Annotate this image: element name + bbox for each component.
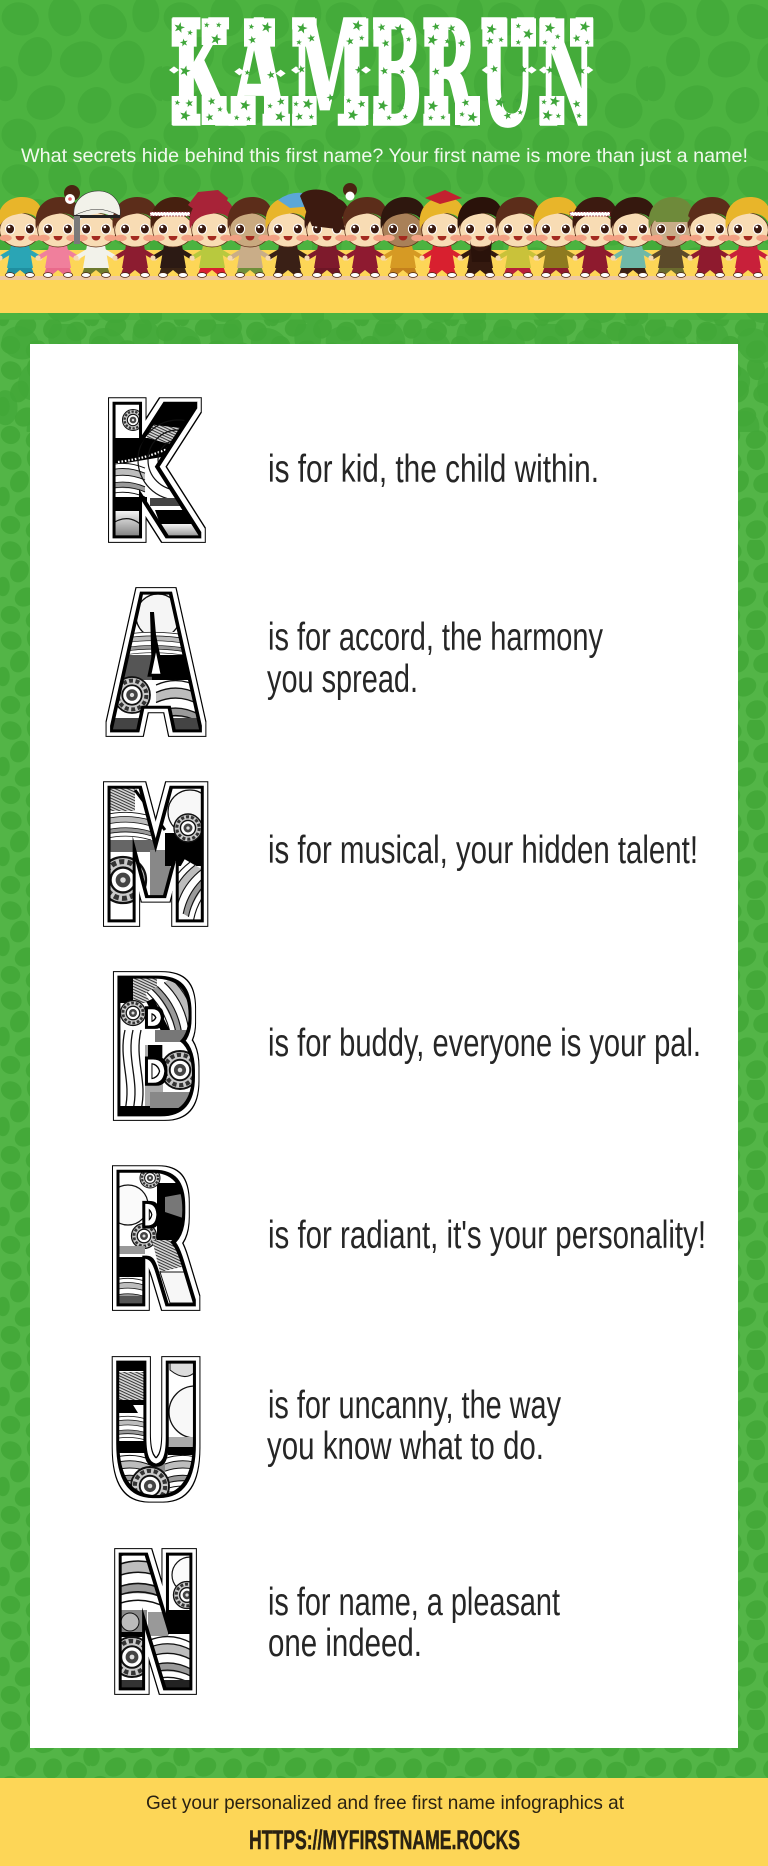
letter U [112, 1356, 200, 1503]
text: one indeed: one indeed. [268, 1622, 422, 1665]
row R [108, 1165, 706, 1315]
letter R [108, 1165, 200, 1315]
subtitle: What secrets hide behind this first name? Your first name is more than just a name! [21, 145, 748, 167]
text: you spread: you spread. [267, 658, 418, 701]
row U [110, 1355, 561, 1505]
row M [100, 780, 698, 930]
text: name: is for name, a pleasant [268, 1581, 560, 1624]
footer text: Get your personalized and free first name infographics at [146, 1792, 625, 1814]
letter K [108, 397, 206, 543]
yellow band [0, 250, 768, 313]
text: uncanny: is for uncanny, the way [268, 1384, 561, 1427]
title: KAMBRUN [169, 0, 595, 159]
row N [110, 1545, 560, 1695]
row K [100, 395, 599, 545]
text: you know: you know what to do. [267, 1425, 544, 1468]
letter B [112, 971, 200, 1121]
letter N [114, 1548, 197, 1695]
white content panel [30, 344, 738, 1748]
footer url: HTTPS://MYFIRSTNAME.ROCKS [249, 1825, 520, 1855]
ground strip [0, 276, 768, 280]
letter A [106, 587, 206, 737]
text: kid: is for kid, the child within. [268, 448, 599, 491]
letter M [103, 781, 208, 927]
text: accord: is for accord, the harmony [268, 616, 603, 659]
row of cartoon children [0, 183, 768, 277]
row B [110, 970, 701, 1125]
row A [100, 585, 603, 740]
footer band [0, 1778, 768, 1866]
